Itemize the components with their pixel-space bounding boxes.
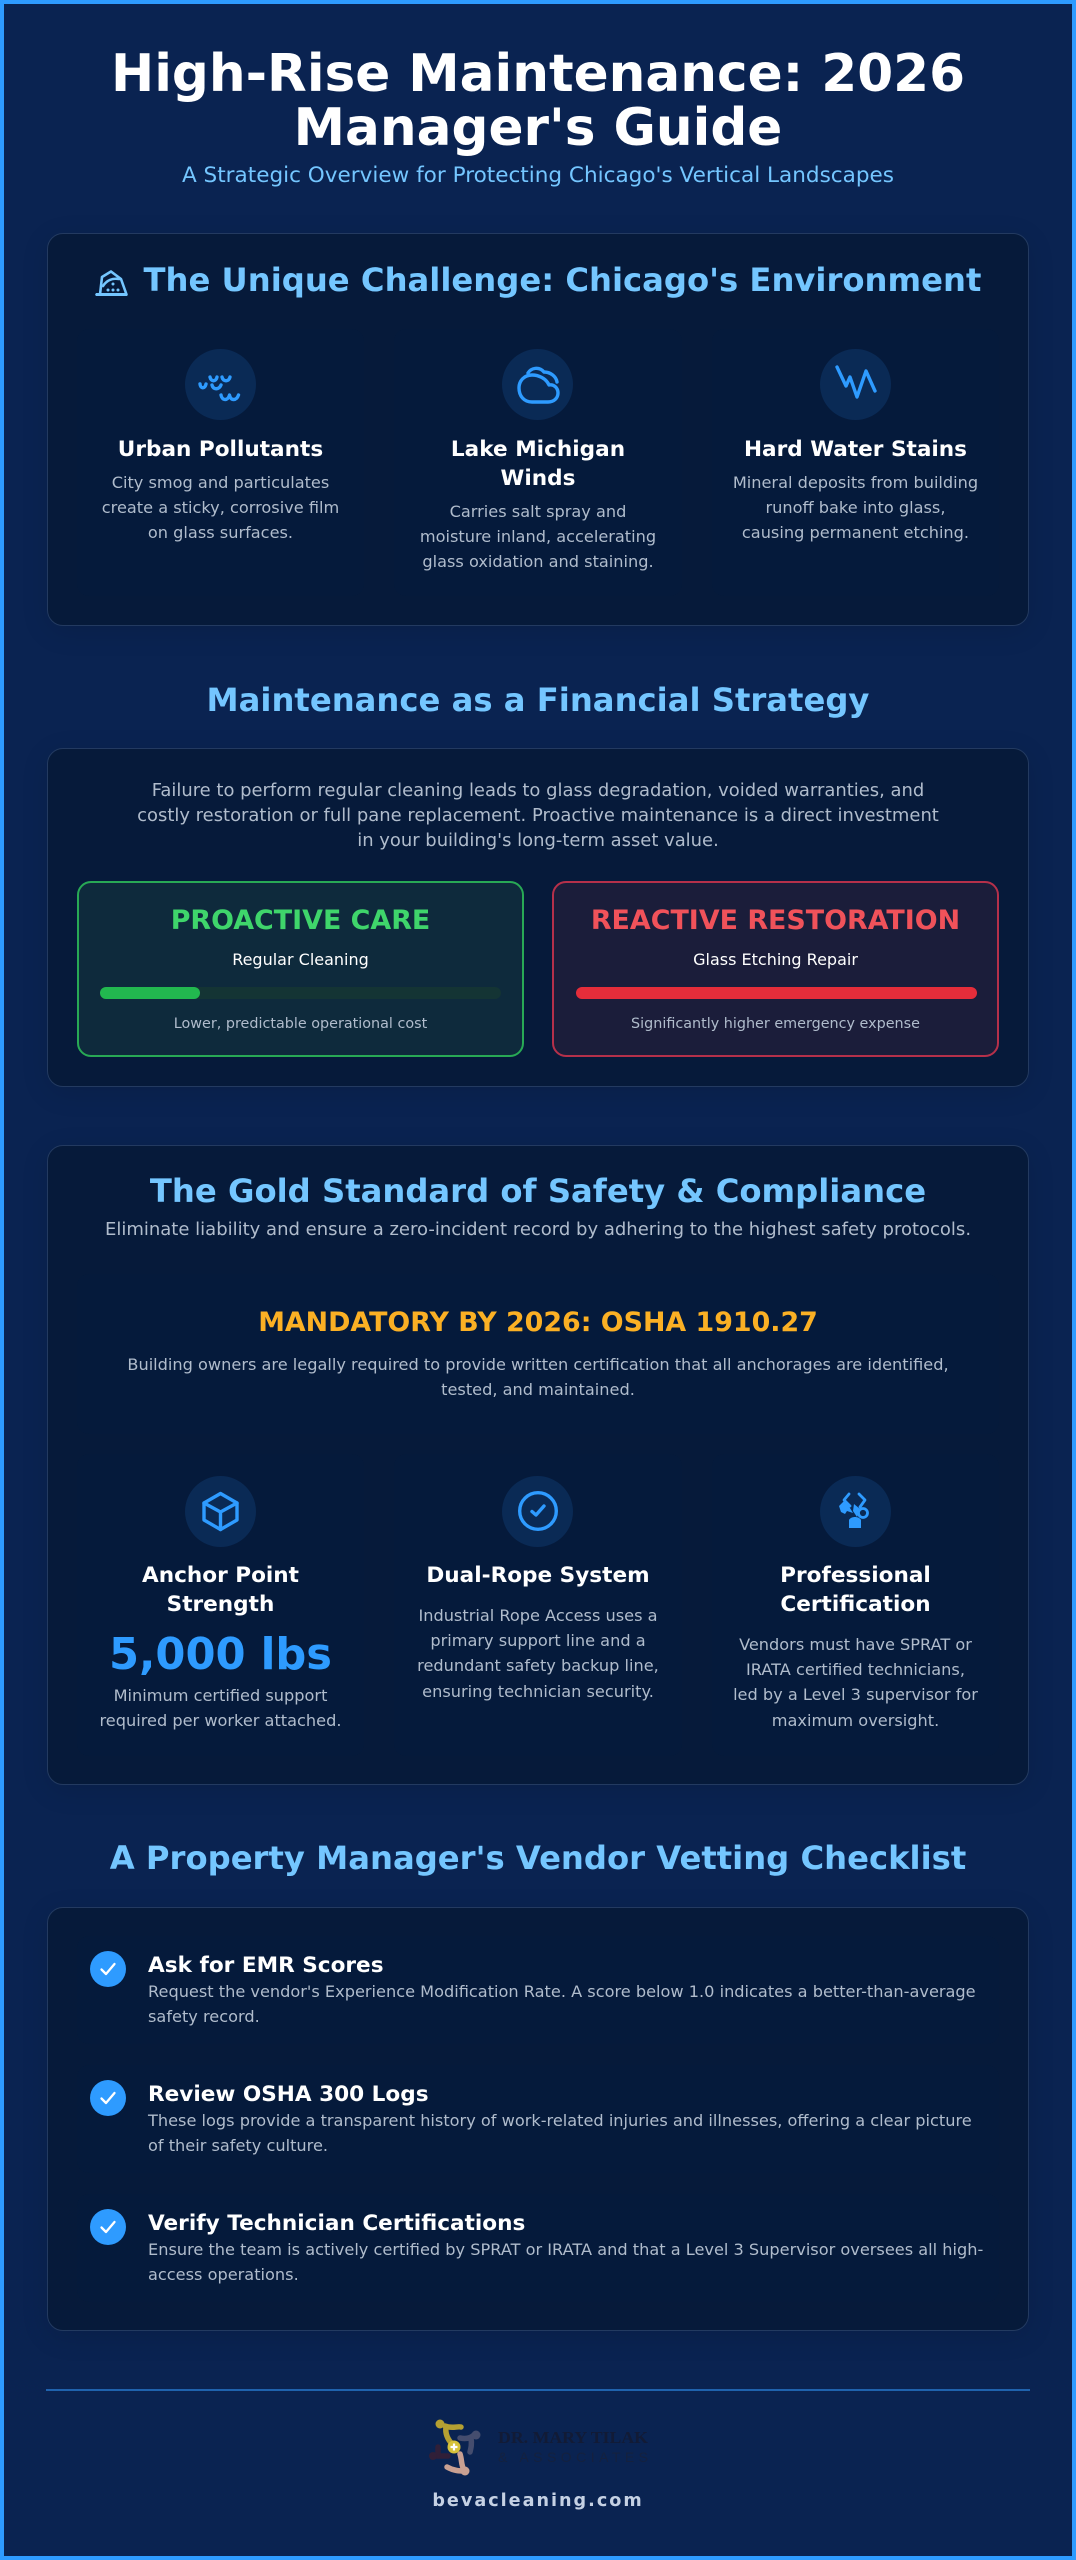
card title: Strength (167, 1592, 274, 1617)
card text (102, 473, 339, 542)
icon circle: certification (820, 1476, 891, 1547)
icon circle: anchor (185, 1476, 256, 1547)
card text: Mineral deposits from building (733, 473, 978, 492)
card: urban pollutants (77, 329, 364, 596)
card title: Anchor Point (142, 1563, 299, 1588)
text: financial intro: costly restoration or full pane replacement. Proactive maintenance is a direct investment (137, 805, 939, 826)
card: anchor point strength (77, 1454, 364, 1756)
card text (733, 473, 978, 542)
card: reactive restoration (552, 881, 999, 1057)
checklist item: emr scores (77, 1936, 999, 2044)
card text (420, 502, 656, 571)
label: regular cleaning: Regular Cleaning (232, 950, 369, 969)
icon: zigzag etching (835, 365, 877, 399)
checklist item: osha logs (77, 2065, 999, 2173)
card text: required per worker attached. (100, 1711, 341, 1730)
card text: primary support line and a (430, 1631, 646, 1650)
heading text: The Unique Challenge: Chicago's Environment (144, 261, 981, 299)
card text (100, 1686, 341, 1730)
callout: osha mandate (77, 1274, 999, 1434)
logo: dr. mary tilak and associates: & ASSOCIATES (498, 2449, 648, 2465)
icon: pollutant waves (198, 375, 240, 402)
bar: proactive cost (100, 987, 500, 999)
card text: City smog and particulates (112, 473, 329, 492)
card text (417, 1606, 659, 1701)
bar: reactive cost (576, 987, 976, 999)
card title: Dual-Rope System (426, 1563, 650, 1588)
card: hard water stains (712, 329, 999, 596)
card title (142, 1563, 299, 1617)
callout text: tested, and maintained. (441, 1380, 635, 1399)
header (111, 44, 965, 188)
icon: cube (202, 1492, 239, 1532)
text: financial intro: in your building's long-term asset value. (357, 830, 719, 851)
card text: glass oxidation and staining. (422, 552, 654, 571)
card text: causing permanent etching. (742, 523, 969, 542)
title: Manager's Guide (294, 98, 782, 158)
item text: technician certifications (148, 2240, 983, 2284)
heading: safety and compliance: The Gold Standard of Safety & Compliance (150, 1172, 926, 1210)
panel: safety and compliance (47, 1145, 1029, 1785)
subtitle: A Strategic Overview for Protecting Chicago's Vertical Landscapes (182, 163, 894, 188)
icon: clouds (517, 366, 560, 404)
website: bevacleaning.com (432, 2491, 644, 2511)
card text: redundant safety backup line, (417, 1656, 659, 1675)
card text: Minimum certified support (114, 1686, 327, 1705)
card title: Hard Water Stains (744, 437, 967, 462)
card text: ensuring technician security. (422, 1682, 654, 1701)
big number: 5,000 lbs (109, 1630, 332, 1680)
card title: Certification (780, 1592, 931, 1617)
item text: technician certifications: Ensure the team is actively certified by SPRAT or IRATA and that a Level 3 Supervisor oversees all high- (148, 2240, 983, 2259)
heading: financial strategy: Maintenance as a Financial Strategy (207, 681, 869, 719)
bar fill: proactive cost (100, 987, 200, 999)
item title: technician certifications: Verify Technician Certifications (148, 2211, 525, 2236)
logo: dr. mary tilak and associates (429, 2420, 649, 2476)
item text: emr scores: safety record. (148, 2007, 260, 2026)
check icon: emr scores (90, 1951, 126, 1987)
card title: Lake Michigan (451, 437, 625, 462)
card title: Urban Pollutants (118, 437, 323, 462)
card title (451, 437, 625, 491)
card title: Professional (780, 1563, 931, 1588)
item text: emr scores: Request the vendor's Experience Modification Rate. A score below 1.0 indicates a better-than-average (148, 1982, 976, 2001)
caption: proactive cost: Lower, predictable operational cost (174, 1016, 427, 1032)
callout title: MANDATORY BY 2026: OSHA 1910.27 (258, 1307, 818, 1338)
callout text (127, 1355, 949, 1399)
text: financial intro: Failure to perform regular cleaning leads to glass degradation, voided warranties, and (152, 780, 924, 801)
card text (733, 1635, 978, 1730)
card text: moisture inland, accelerating (420, 527, 656, 546)
icon circle: dual-rope (502, 1476, 573, 1547)
heading: the unique challenge (95, 261, 981, 299)
caption: reactive cost: Significantly higher emergency expense (631, 1016, 920, 1032)
card text: Industrial Rope Access uses a (418, 1606, 658, 1625)
text: safety intro: Eliminate liability and ensure a zero-incident record by adhering to the highest safety protocols. (105, 1219, 971, 1240)
card text: led by a Level 3 supervisor for (733, 1685, 978, 1704)
card text: on glass surfaces. (148, 523, 293, 542)
card text: Vendors must have SPRAT or (739, 1635, 972, 1654)
card text: runoff bake into glass, (766, 498, 945, 517)
panel: financial strategy (47, 748, 1029, 1087)
panel: the unique challenge (47, 233, 1029, 626)
icon circle: hard water (820, 349, 891, 420)
card text: Carries salt spray and (450, 502, 626, 521)
item text: technician certifications: access operations. (148, 2265, 299, 2284)
icon circle: pollutants (185, 349, 256, 420)
card title: Winds (501, 466, 575, 491)
card: proactive care (77, 881, 524, 1057)
panel: vendor checklist (47, 1907, 1029, 2331)
title (111, 44, 965, 158)
heading: vendor checklist: A Property Manager's Vendor Vetting Checklist (110, 1839, 966, 1877)
card: lake michigan winds (394, 329, 682, 596)
logo: dr. mary tilak and associates: DR. MARY TILAK (498, 2428, 649, 2447)
card text: IRATA certified technicians, (746, 1660, 965, 1679)
card text: maximum oversight. (772, 1711, 939, 1730)
check icon: technician certifications (90, 2209, 126, 2245)
item text: emr scores (148, 1982, 976, 2026)
callout text: Building owners are legally required to provide written certification that all anchorages are identified, (127, 1355, 949, 1374)
text: financial intro (137, 780, 939, 851)
label: glass etching repair: Glass Etching Repair (693, 950, 858, 969)
card title (780, 1563, 931, 1617)
card: dual-rope system (394, 1454, 682, 1756)
check icon: osha logs (90, 2080, 126, 2116)
icon: building dome (95, 270, 128, 296)
item title: osha logs: Review OSHA 300 Logs (148, 2082, 429, 2107)
icon: check circle (518, 1491, 558, 1531)
card text: create a sticky, corrosive film (102, 498, 339, 517)
checklist item: technician certifications (77, 2194, 999, 2302)
card title: proactive care: PROACTIVE CARE (171, 905, 430, 936)
item title: emr scores: Ask for EMR Scores (148, 1953, 384, 1978)
card: professional certification (712, 1454, 999, 1756)
item text: osha logs (148, 2111, 972, 2155)
icon: climbing gear (839, 1492, 869, 1528)
footer divider (46, 2389, 1030, 2391)
item text: osha logs: These logs provide a transparent history of work-related injuries and illnesses, offering a clear picture (148, 2111, 972, 2130)
title: High-Rise Maintenance: 2026 (111, 44, 965, 104)
icon circle: winds (502, 349, 573, 420)
card title: reactive restoration: REACTIVE RESTORATION (591, 905, 960, 936)
item text: osha logs: of their safety culture. (148, 2136, 328, 2155)
